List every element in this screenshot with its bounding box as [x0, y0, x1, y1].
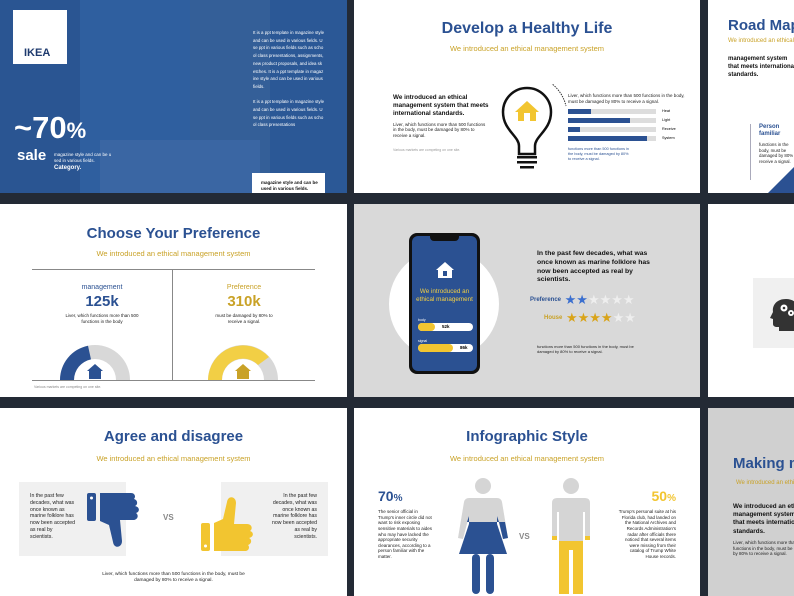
star ratings: Preference ★★★★★★: [530, 292, 635, 307]
panel: Infographic Style: We introduced an ethical management system: [450, 454, 604, 463]
title: Develop a Healthy Life: [442, 20, 612, 37]
footer text: damaged by 80% to receive a signal.: [134, 578, 213, 583]
bar chart: Light: [662, 118, 670, 122]
stat: preference: Preference: [227, 284, 261, 291]
panel: Develop a Healthy Life: [354, 0, 700, 193]
panel: phone and ratings: [354, 204, 700, 397]
stat: preference: 310k: [227, 293, 261, 310]
stat: preference: receive a signal.: [228, 319, 260, 324]
right text box: In the past few decades, what was once known as marine folklore has now been accepted as real by scientists.: [272, 493, 317, 540]
icon: man figure: [552, 478, 590, 594]
panel: Making: [708, 408, 794, 596]
footer text: Liver, which functions more than 500 functions in the body, must be: [102, 572, 245, 577]
panel: Road Map: standards.: [728, 72, 758, 78]
phone: 52k: [442, 324, 450, 329]
panel: IKEA cover: Category.: [54, 165, 81, 171]
icon: thumbs down: [87, 493, 139, 547]
panel: Infographic Style: [354, 408, 700, 596]
bullet text: [393, 94, 489, 152]
phone: 86k: [460, 345, 468, 350]
bullet text: Various markets are competing on one site.: [393, 148, 460, 152]
panel: head icon: [708, 204, 794, 397]
stat: management: [65, 284, 139, 324]
white caption box: magazine style and can be used in various fields.: [261, 180, 318, 191]
subtitle: We introduced an ethical management system: [450, 44, 604, 53]
panel: Making: management system: [733, 511, 794, 518]
donut: preference: [208, 345, 278, 380]
panel: Choose Your Preference: Choose Your Preference: [87, 225, 260, 242]
body text: It is a ppt template in magazine style and can be used in various fields. U se ppt in various fields such as scho ol class presentations, assignments, new product proposals, and idea sk etches. It is a ppt template in magaz ine style and can be used in various fields.: [253, 30, 324, 89]
panel: Making: standards.: [733, 528, 765, 535]
icon: lightbulb with house: [502, 84, 566, 168]
person familiar: Person: [759, 124, 779, 130]
bar chart: Receive: [662, 127, 676, 131]
icon: woman figure: [458, 478, 508, 594]
star ratings: House ★★★★★★: [544, 310, 636, 325]
panel: Road Map: management system: [728, 56, 787, 62]
phone: [409, 233, 480, 374]
bar chart: Liver, which functions more than 500 functions in the body, must be damaged by 80% to receive a signal.: [568, 93, 684, 104]
stat: management: Liver, which functions more than 500: [65, 313, 139, 318]
phone: We introduced an ethical management: [416, 288, 473, 303]
panel: Road Map: that meets international: [728, 64, 794, 70]
logo box: [13, 10, 67, 64]
panel: Choose Your Preference: We introduced an ethical management system: [96, 249, 251, 258]
phone: signal: [418, 339, 427, 343]
stat: preference: must be damaged by 80% to: [215, 313, 273, 318]
panel: Making: functions in the body, must be: [733, 546, 792, 551]
panel: Road Map: We introduced an ethical: [728, 38, 794, 44]
panel: Infographic Style: Infographic Style: [466, 428, 588, 445]
big percentage: ~70%: [14, 110, 86, 145]
person familiar: [750, 124, 794, 180]
left text box: In the past few decades, what was once known as marine folklore has now been accepted as real by scientists.: [30, 493, 75, 540]
phone: body: [418, 318, 426, 322]
panel: IKEA cover: [0, 0, 347, 193]
stat: management: functions in the body: [81, 319, 123, 324]
panel: phone and ratings: functions more than 500 functions in the body, must be damaged by 80% to receive a signal.: [537, 344, 634, 354]
panel: Agree and disagree: Agree and disagree: [104, 428, 243, 445]
vs: VS: [163, 513, 174, 522]
person familiar: familiar: [759, 131, 780, 137]
stat: management: 125k: [85, 293, 119, 310]
panel: Choose Your Preference: [0, 204, 347, 397]
sale label: sale: [17, 147, 46, 164]
stat: 70%: The senior official in Trump's inner circle did not want to risk exposing sensitive materials to aides who may have lacked the appropriate security clearances, according to a person familiar with the matter.: [378, 509, 432, 559]
stat: management: management: [82, 284, 122, 291]
panel: IKEA cover: magazine style and can be u sed in various fields.: [54, 152, 111, 163]
stat: 70%: 70%: [378, 488, 402, 504]
icon: thumbs up: [201, 497, 253, 551]
star ratings: [530, 292, 636, 325]
panel: Road Map: [708, 0, 794, 193]
bullet text: Liver, which functions more than 500 functions in the body, must be damaged by 80% to receive a signal.: [393, 122, 485, 138]
headline text: In the past few decades, what was once known as marine folklore has now been accepted as real by scientists.: [537, 250, 650, 283]
panel: Choose Your Preference: Various markets are competing on one site.: [34, 385, 101, 389]
panel: Agree and disagree: We introduced an ethical management system: [96, 454, 251, 463]
bar chart: [568, 93, 684, 161]
stat: 50%: Trump's personal suite at his Florida club, had landed on the National Archives and Records Administration's radar after officials there noticed that several items were missing from their catalog of Trump White House records.: [619, 509, 676, 559]
panel: Agree and disagree: [0, 408, 347, 596]
body text: It is a ppt template in magazine style and can be used in various fields. U se ppt in various fields such as scho ol class presentations: [253, 99, 324, 127]
right text box: [221, 482, 328, 556]
bar chart: Heat: [662, 109, 670, 113]
stat: 50%: 50%: [652, 488, 676, 504]
footer text: [102, 572, 245, 583]
bar chart: System: [662, 136, 675, 140]
left text box: [19, 482, 126, 556]
bar chart: functions more than 500 functions in the body, must be damaged by 80% to receive a signal.: [568, 147, 629, 161]
logo box: IKEA: [24, 47, 50, 59]
panel: Making: by 80% to receive a signal.: [733, 551, 787, 556]
bullet text: We introduced an ethical management system that meets international standards.: [393, 94, 489, 117]
icon: head with gears: [770, 299, 794, 331]
white caption box: [252, 173, 325, 193]
donut: management: [60, 345, 130, 380]
stat: preference: [215, 284, 273, 324]
vs: VS: [519, 532, 530, 541]
body text: [253, 30, 324, 127]
